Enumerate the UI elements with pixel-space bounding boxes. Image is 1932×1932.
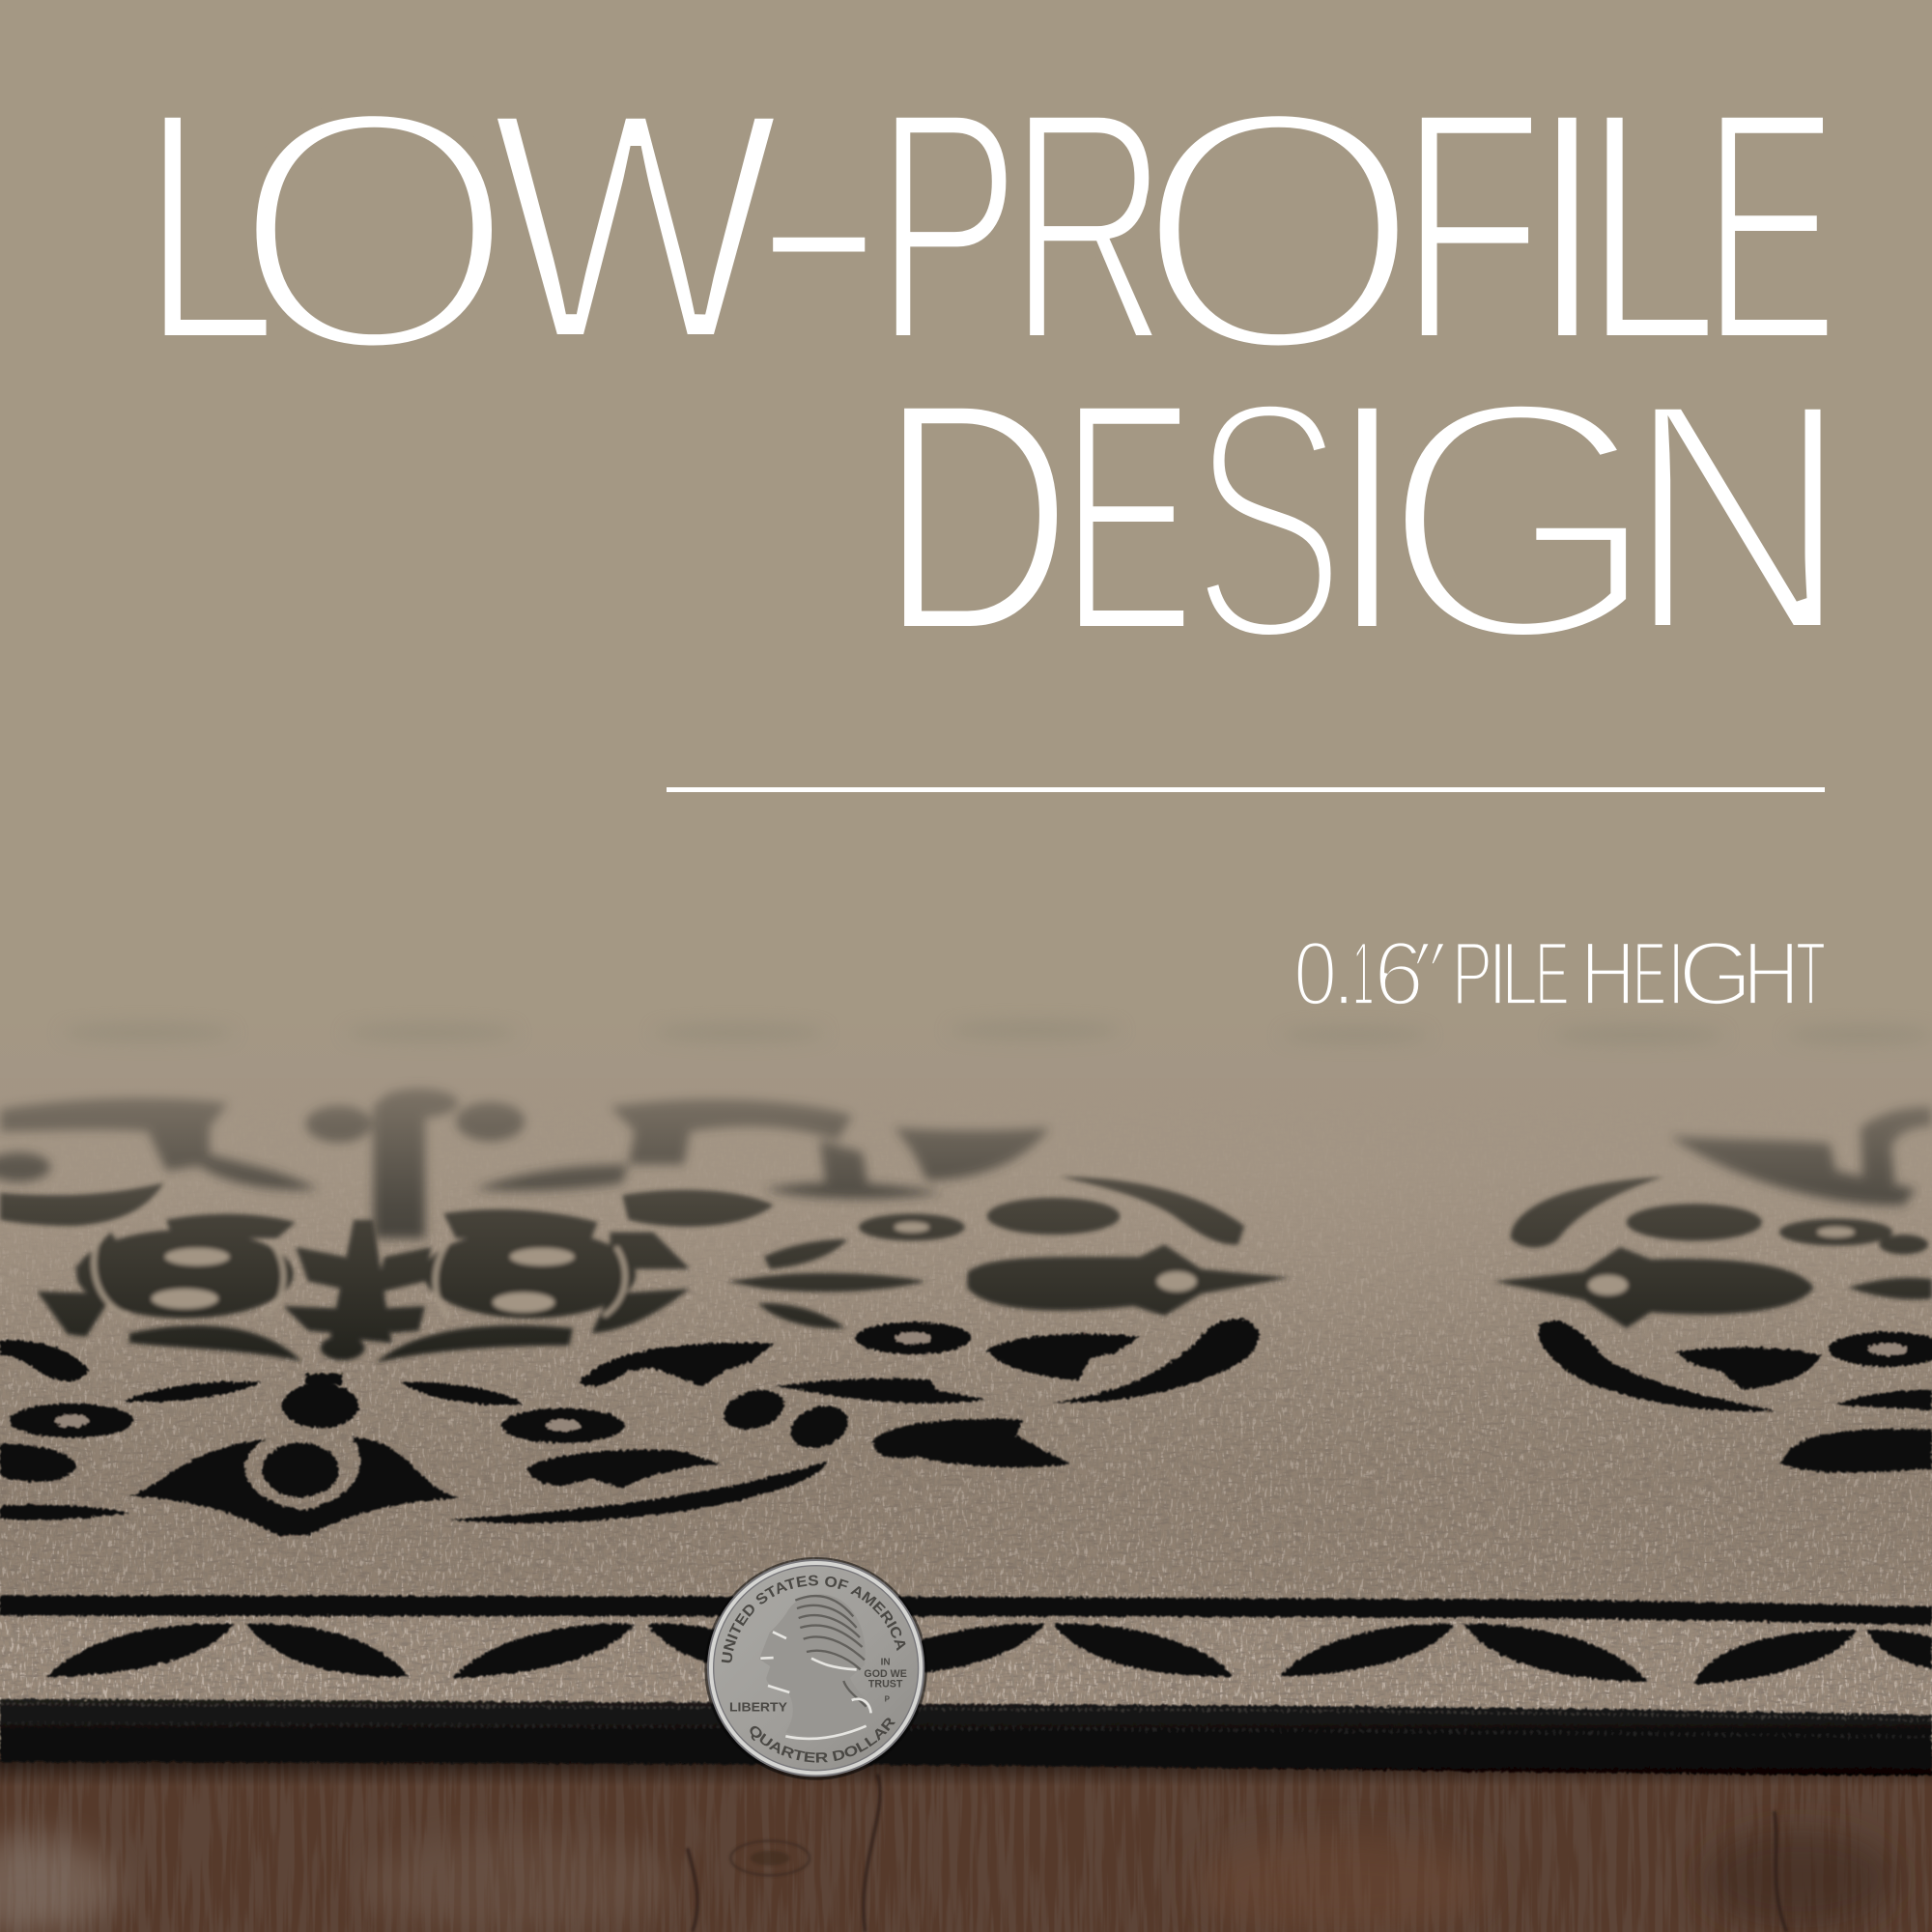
coin lettering: TRUST — [868, 1679, 903, 1690]
atmospheric depth fade — [0, 1078, 1932, 1361]
coin lettering — [721, 1575, 907, 1763]
coin lettering: UNITED STATES OF AMERICA — [721, 1575, 906, 1663]
subtitle: pile height: 1 — [1352, 923, 1374, 1024]
title: LOW-PROFILE DESIGN: P — [875, 42, 1021, 411]
rug tone shading — [0, 1171, 1932, 1719]
rug border stripe — [0, 1596, 1932, 1625]
wood floor — [0, 1749, 1932, 1932]
quarter dollar coin — [704, 1557, 927, 1780]
subtitle: pile height — [1293, 923, 1826, 1024]
subtitle: pile height: H — [1580, 923, 1635, 1024]
portrait — [759, 1594, 872, 1739]
title: LOW-PROFILE DESIGN: O — [231, 38, 518, 423]
title: LOW-PROFILE DESIGN: E — [1061, 332, 1195, 701]
coin lettering: GOD WE — [864, 1668, 907, 1680]
subtitle: pile height: T — [1796, 923, 1826, 1024]
rug surface — [0, 1005, 1932, 1731]
border leaf scallops — [46, 1624, 1932, 1685]
divider rule — [667, 787, 1825, 792]
subtitle: pile height: ″ — [1399, 923, 1452, 1024]
title: LOW-PROFILE DESIGN: D — [878, 332, 1074, 701]
title: LOW-PROFILE DESIGN: O — [1134, 38, 1423, 423]
title: LOW-PROFILE DESIGN: - — [746, 34, 892, 403]
subtitle: pile height: H — [1743, 923, 1800, 1024]
title: LOW-PROFILE DESIGN: G — [1379, 328, 1661, 712]
title: LOW-PROFILE DESIGN: R — [1009, 42, 1168, 411]
title: LOW-PROFILE DESIGN: L — [141, 42, 278, 411]
coin lettering: P — [885, 1695, 891, 1704]
coin lettering: QUARTER DOLLAR — [750, 1718, 895, 1763]
title: LOW-PROFILE DESIGN: I — [1528, 42, 1606, 411]
subtitle: pile height: E — [1535, 923, 1570, 1024]
title: LOW-PROFILE DESIGN: L — [1583, 42, 1719, 411]
title: LOW-PROFILE DESIGN: I — [1328, 332, 1406, 701]
subtitle: pile height: I — [1488, 923, 1508, 1024]
far damask motif row — [0, 1088, 1932, 1238]
title: LOW-PROFILE DESIGN — [141, 34, 1852, 712]
title: LOW-PROFILE DESIGN: E — [1702, 42, 1838, 411]
title: LOW-PROFILE DESIGN: W — [489, 42, 781, 411]
subtitle: pile height: G — [1678, 923, 1752, 1024]
subtitle: pile height: E — [1633, 923, 1666, 1024]
mid damask motif row — [0, 1177, 1932, 1363]
subtitle: pile height: . — [1331, 923, 1356, 1024]
subtitle: pile height: L — [1501, 923, 1538, 1024]
rug bound edge — [0, 1699, 1932, 1776]
coin lettering: LIBERTY — [729, 1700, 787, 1715]
title: LOW-PROFILE DESIGN: F — [1399, 42, 1544, 411]
subtitle: pile height: 0 — [1293, 923, 1337, 1024]
coin lettering: IN — [881, 1657, 891, 1667]
title: LOW-PROFILE DESIGN: N — [1624, 332, 1852, 701]
subtitle: pile height: 6 — [1374, 923, 1424, 1024]
horizon haze bands — [62, 1021, 1932, 1043]
near damask motif row — [0, 1319, 1932, 1535]
rug weave texture — [0, 1236, 1932, 1721]
subtitle: pile height: I — [1667, 923, 1685, 1024]
subtitle: pile height: P — [1452, 923, 1492, 1024]
title: LOW-PROFILE DESIGN: S — [1190, 328, 1347, 712]
